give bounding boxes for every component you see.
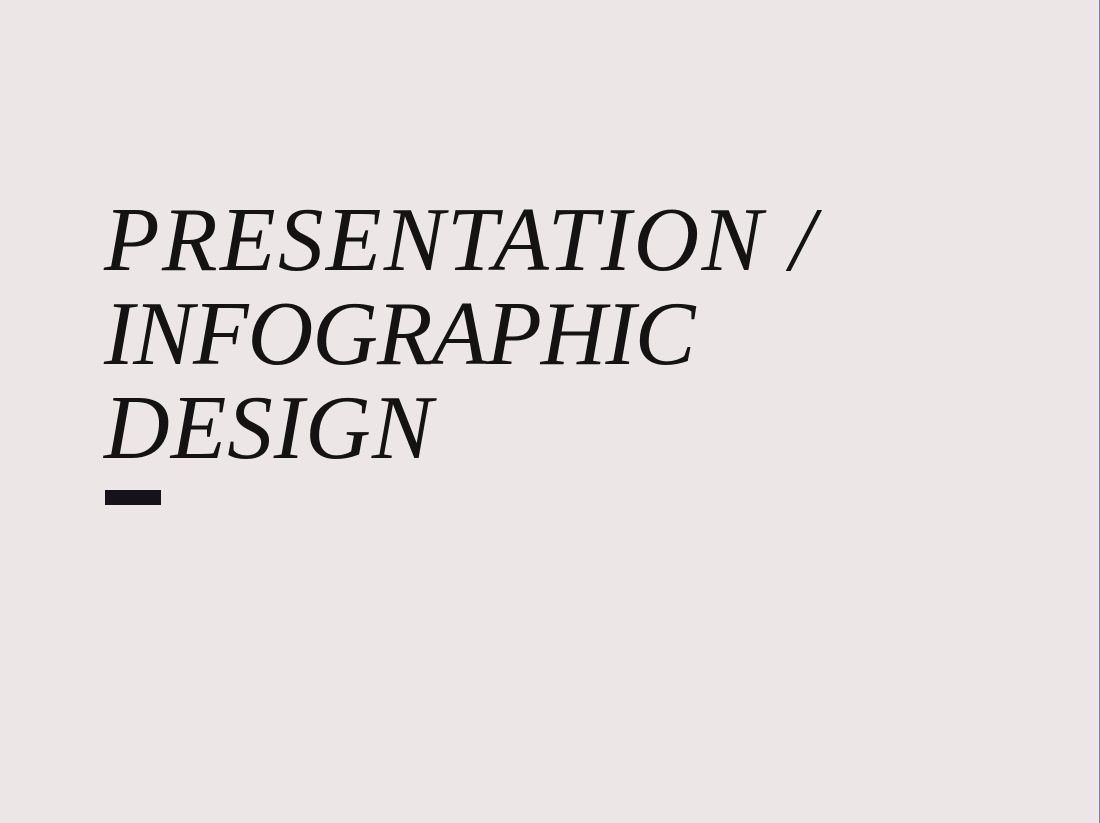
title: PRESENTATION / (104, 189, 818, 290)
accent bar (105, 490, 161, 505)
title (103, 189, 822, 478)
title: INFOGRAPHIC (104, 283, 694, 384)
title: DESIGN (104, 377, 434, 478)
